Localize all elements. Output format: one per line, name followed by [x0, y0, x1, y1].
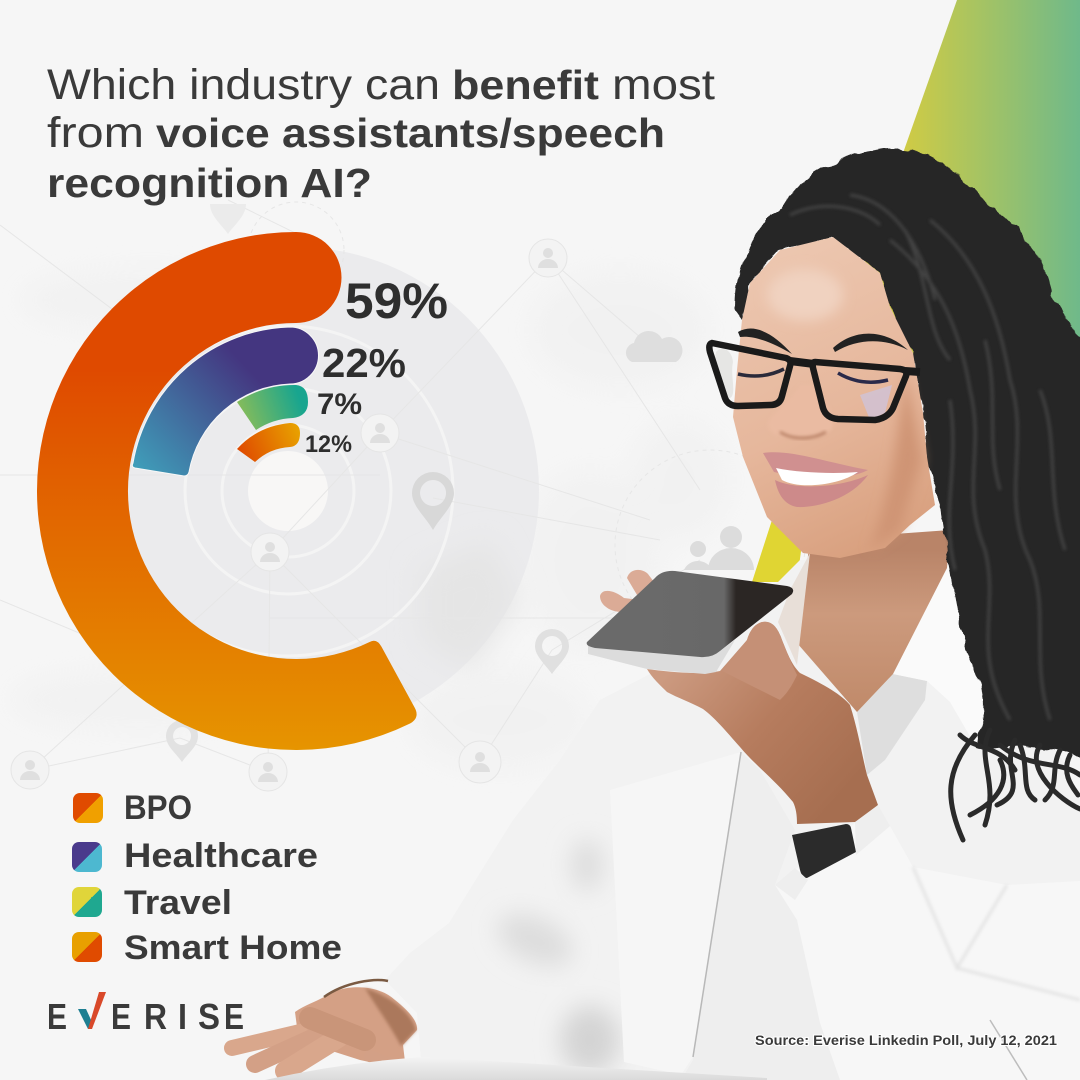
- logo: Everise: E: [224, 996, 244, 1037]
- collar shadow: [857, 674, 927, 775]
- value: 7%: 7%: [317, 388, 362, 421]
- icon: cloud: [626, 331, 682, 362]
- neck: [797, 530, 950, 712]
- legend item: Smart Home: Smart Home: [124, 929, 342, 967]
- hair main: [735, 148, 1080, 840]
- watch: [792, 824, 856, 878]
- hair strands: [790, 195, 1065, 720]
- icon: people group: [684, 526, 754, 570]
- sleeve arm: [775, 805, 1080, 1080]
- eyebrow right: [833, 334, 908, 352]
- collar right: [893, 564, 1010, 745]
- cuff edge: [324, 980, 388, 997]
- nose: [768, 385, 833, 438]
- accent: diagonal yellow-green band: [830, 0, 1080, 360]
- fingers: [232, 1018, 400, 1071]
- icon: map pin large: [412, 472, 454, 530]
- cheek shadow: [870, 370, 922, 550]
- sleeve cuff: [775, 805, 890, 900]
- logo: Everise: I: [178, 996, 187, 1037]
- arc: BPO 59%: [37, 232, 417, 750]
- blazer soft shadows: [489, 839, 817, 1074]
- logo: Everise: [47, 992, 244, 1037]
- title: benefit: [452, 62, 599, 108]
- collar left: [778, 553, 810, 665]
- icon: map pin lower: [535, 629, 569, 674]
- legend item: BPO: BPO: [124, 789, 192, 827]
- inner shirt: [681, 752, 845, 1080]
- lens reflection: [715, 349, 733, 398]
- table edge: [265, 1057, 767, 1080]
- eyelash right: [838, 373, 888, 382]
- nose base: [780, 432, 826, 438]
- title: most: [612, 61, 715, 109]
- face: [709, 237, 935, 558]
- lapel: [610, 752, 741, 1075]
- title: [47, 61, 715, 206]
- title: voice assistants/speech: [156, 110, 665, 156]
- phone: [587, 571, 793, 674]
- hair lower curls: [951, 730, 1080, 840]
- sleeve creases: [913, 867, 1080, 1000]
- logo: Everise: E: [47, 996, 67, 1037]
- lower hand on table: [232, 980, 417, 1071]
- lapel edge: [693, 752, 741, 1057]
- legend item: Healthcare: Healthcare: [124, 837, 318, 875]
- eyebrow left: [738, 329, 792, 354]
- legend item: BPO: [73, 789, 192, 827]
- icon: map pin left: [166, 720, 198, 762]
- value: 59%: 59%: [345, 273, 448, 329]
- logo: Everise: R: [144, 996, 167, 1037]
- logo: Everise: S: [198, 996, 220, 1037]
- icon: map pin top: [210, 204, 246, 234]
- lens reflection right: [860, 385, 892, 420]
- blazer: [385, 560, 1080, 1080]
- index finger over phone: [722, 622, 797, 700]
- forehead highlight: [767, 269, 843, 321]
- value: 12%: 12%: [305, 431, 352, 458]
- title: recognition AI?: [47, 160, 372, 206]
- title: Which industry can: [47, 61, 440, 109]
- hand and forearm: [647, 622, 878, 824]
- value: 22%: 22%: [322, 340, 406, 386]
- arc: Smart Home 12%: [237, 423, 300, 462]
- mouth: [763, 452, 868, 507]
- icon: logo check V: [78, 992, 106, 1029]
- legend item: Travel: Travel: [124, 884, 232, 922]
- photo: woman using phone voice assistant: [232, 148, 1080, 1080]
- fingers behind phone: [600, 570, 660, 612]
- legend: [72, 789, 342, 967]
- title: from: [47, 109, 144, 157]
- wrist shade: [365, 988, 416, 1046]
- legend item: Travel: [72, 884, 232, 922]
- accent: lower yellow piece: [752, 520, 805, 582]
- icons: user nodes: [11, 239, 567, 791]
- source note: Source: Everise Linkedin Poll, July 12, 2021: [755, 1033, 1058, 1048]
- arc: Healthcare 22%: [132, 327, 318, 476]
- eyelash left: [738, 369, 784, 376]
- back of hand: [295, 987, 417, 1070]
- arc: Travel 7%: [237, 385, 308, 430]
- sleeve seam: [990, 1020, 1027, 1080]
- background: faint network map: [0, 200, 805, 791]
- radial bar chart: [37, 232, 448, 750]
- glasses: [709, 343, 920, 420]
- logo: Everise: E: [111, 996, 131, 1037]
